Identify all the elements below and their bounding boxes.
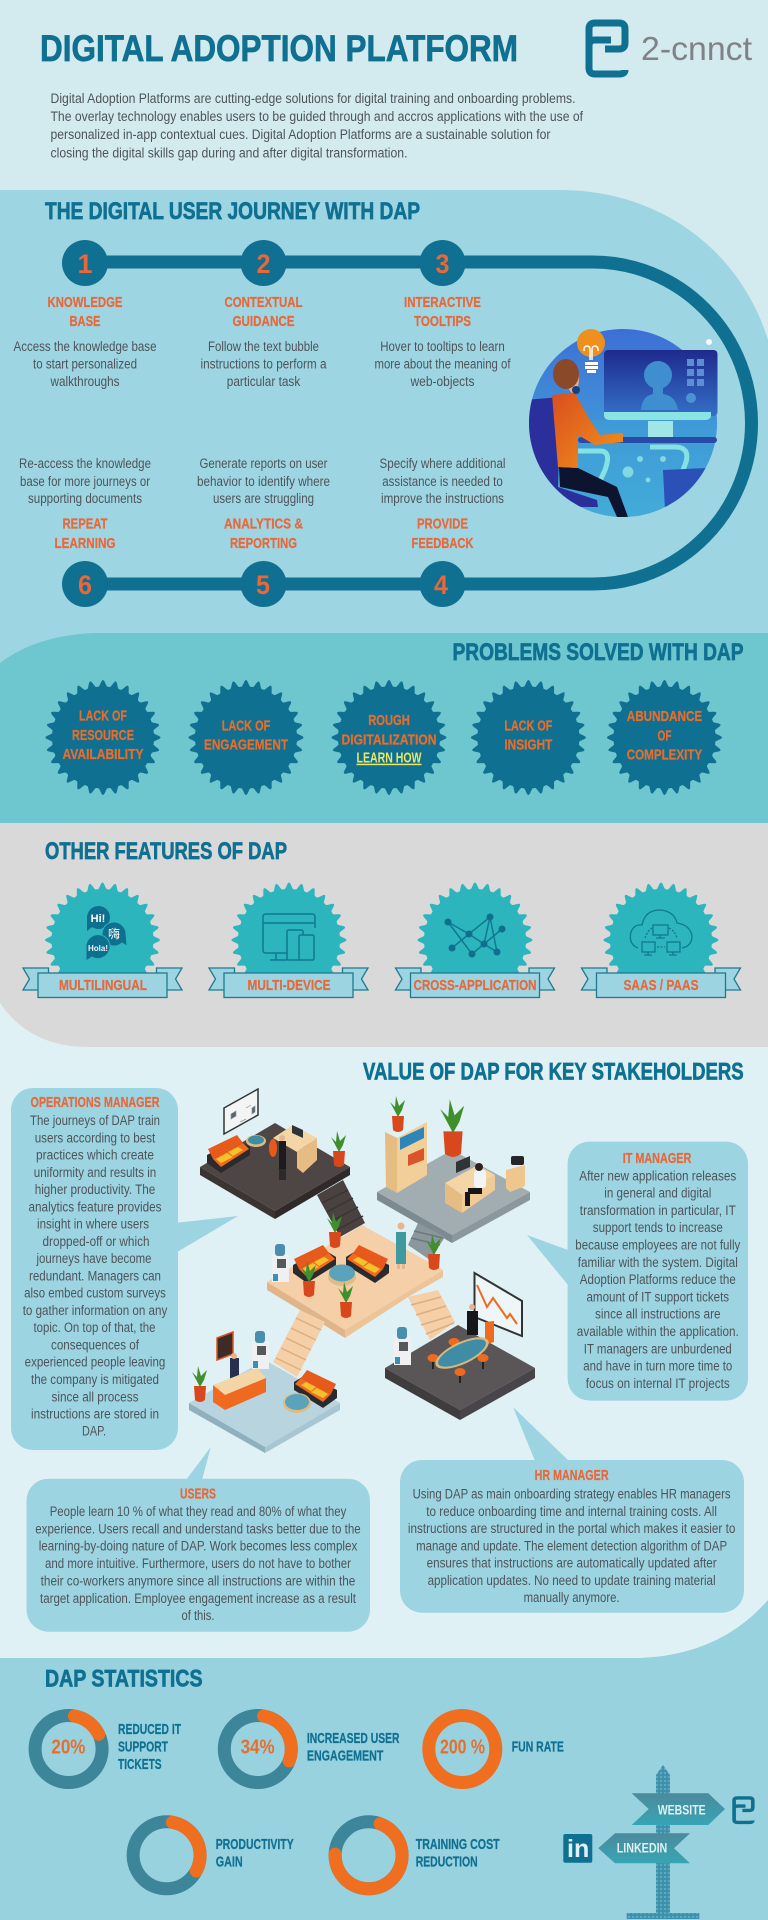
- panel: other features: [0, 823, 768, 1047]
- room: meeting room: [385, 1273, 535, 1420]
- step 1: 1: [77, 249, 93, 279]
- step 5: users are struggling: [213, 491, 314, 506]
- room: IT office: [377, 1096, 530, 1260]
- card: users: [26, 1447, 370, 1632]
- step 1: Access the knowledge base: [14, 339, 156, 354]
- badge: abundance of complexity: COMPLEXITY: [627, 747, 702, 764]
- feature: multi-device: [209, 882, 368, 998]
- step 3: Hover to tooltips to learn: [380, 339, 505, 354]
- card: operations manager: instructions are stored in: [31, 1406, 159, 1422]
- card: operations manager: OPERATIONS MANAGER: [30, 1094, 160, 1111]
- badge: rough digitalization: LEARN HOW: [356, 750, 422, 767]
- stat: fun rate: FUN RATE: [512, 1739, 564, 1756]
- feature: cross-application: CROSS-APPLICATION: [414, 977, 536, 994]
- room: manager office: [200, 1089, 365, 1237]
- stairs: lounge to meeting room: [408, 1290, 455, 1340]
- card: HR manager: [400, 1407, 744, 1613]
- step 4: PROVIDE: [417, 516, 468, 532]
- step 5: [197, 456, 330, 607]
- feature: saas / paas: [582, 882, 740, 998]
- step 2: particular task: [227, 374, 300, 389]
- heading: journey: THE DIGITAL USER JOURNEY WITH DAP: [45, 198, 420, 225]
- step 3: INTERACTIVE: [404, 294, 481, 311]
- step 5: 5: [256, 570, 270, 600]
- signpost: [563, 1765, 753, 1919]
- stat: reduced IT support tickets: SUPPORT: [118, 1739, 168, 1756]
- stat: increased user engagement: ENGAGEMENT: [307, 1747, 383, 1764]
- card: users: USERS: [180, 1486, 216, 1502]
- stat: training cost reduction: [326, 1812, 500, 1898]
- stat: reduced IT support tickets: [30, 1710, 181, 1788]
- card: users: experience. Users recall and understand tasks better due to the: [35, 1521, 361, 1536]
- card: IT manager: Adoption Platforms reduce the: [580, 1272, 736, 1287]
- heading: statistics: DAP STATISTICS: [45, 1666, 202, 1693]
- stat: fun rate: [429, 1716, 564, 1782]
- card: operations manager: to gather information on any: [23, 1303, 168, 1318]
- title: DIGITAL ADOPTION PLATFORM: [40, 28, 518, 69]
- step 4: assistance is needed to: [382, 474, 503, 489]
- card: IT manager: support tends to increase: [593, 1220, 723, 1235]
- card: operations manager: users according to best: [35, 1130, 156, 1145]
- stat: fun rate: 200 %: [440, 1736, 485, 1758]
- badge: abundance of complexity: [607, 680, 722, 795]
- stat: increased user engagement: [219, 1710, 400, 1788]
- badge: lack of engagement: LACK OF: [222, 718, 270, 735]
- step 6: LEARNING: [54, 535, 116, 552]
- card: HR manager: ensures that instructions are automatically updated after: [427, 1556, 717, 1571]
- stat: productivity gain: [128, 1816, 294, 1894]
- heading: features: OTHER FEATURES OF DAP: [45, 838, 287, 865]
- card: users: learning-by-doing nature of DAP. Work becomes less complex: [39, 1539, 358, 1554]
- panel: digital user journey: [0, 190, 768, 700]
- card: operations manager: since all process: [52, 1389, 139, 1404]
- card: IT manager: amount of IT support tickets: [586, 1289, 729, 1304]
- icon: linkedin: in: [567, 1835, 589, 1863]
- intro text: The overlay technology enables users to be guided through and accros applications with the use of: [50, 109, 583, 124]
- badge: abundance of complexity: ABUNDANCE: [627, 708, 702, 725]
- badge: lack of insight: INSIGHT: [504, 737, 552, 754]
- card: IT manager: and have in turn more time to: [583, 1359, 732, 1374]
- step 2: [200, 240, 327, 389]
- stat: increased user engagement: INCREASED USER: [307, 1730, 400, 1747]
- illustration: person at monitor: [524, 329, 718, 520]
- card: operations manager: dropped-off or which: [42, 1234, 150, 1249]
- room: central lounge: [267, 1212, 443, 1338]
- stat: training cost reduction: TRAINING COST: [416, 1836, 500, 1853]
- icon: small logo: [734, 1798, 753, 1822]
- badge: rough digitalization: DIGITALIZATION: [342, 732, 436, 749]
- isometric office illustration: [189, 1089, 535, 1453]
- card: operations manager: The journeys of DAP train: [30, 1113, 160, 1128]
- stat: productivity gain: GAIN: [216, 1854, 243, 1871]
- feature: multilingual: Hi!: [91, 913, 105, 925]
- card: operations manager: practices which create: [36, 1148, 154, 1162]
- step 6: base for more journeys or: [20, 474, 150, 489]
- card: operations manager: the company is mitigated: [31, 1372, 159, 1387]
- sign: website: [632, 1793, 725, 1825]
- step 4: FEEDBACK: [412, 535, 474, 552]
- badge: lack of resource availability: LACK OF: [79, 708, 127, 725]
- feature: multilingual: 嗨: [108, 927, 120, 941]
- badge: lack of insight: [471, 680, 586, 795]
- step 2: instructions to perform a: [200, 356, 327, 372]
- card: HR manager: application updates. No need to update training material: [428, 1573, 716, 1588]
- step 2: CONTEXTUAL: [224, 294, 302, 311]
- card: operations manager: uniformity and results in: [34, 1165, 156, 1180]
- step 6: [19, 456, 151, 607]
- stakeholder background: [0, 990, 768, 1670]
- card: operations manager: DAP.: [82, 1424, 106, 1439]
- step 6: supporting documents: [28, 491, 142, 506]
- card: operations manager: higher productivity. The: [35, 1182, 155, 1197]
- sign: linkedin: [598, 1833, 690, 1863]
- step 5: behavior to identify where: [197, 474, 330, 489]
- card: HR manager: HR MANAGER: [535, 1467, 609, 1484]
- sign: linkedin: LINKEDIN: [617, 1839, 667, 1855]
- step 4: Specify where additional: [380, 456, 506, 471]
- step 1: KNOWLEDGE: [48, 294, 122, 311]
- feature: multilingual: [23, 882, 182, 998]
- step 3: 3: [436, 249, 450, 279]
- badge: lack of engagement: ENGAGEMENT: [204, 737, 288, 754]
- card: operations manager: topic. On top of that, the: [34, 1320, 156, 1335]
- badge: abundance of complexity: OF: [658, 728, 672, 745]
- step 6: REPEAT: [62, 516, 108, 532]
- card: HR manager: manually anymore.: [524, 1590, 620, 1605]
- logo: 2-cnnct: 2-cnnct: [641, 30, 752, 67]
- card: IT manager: since all instructions are: [595, 1307, 721, 1322]
- feature: multi-device: MULTI-DEVICE: [248, 977, 330, 994]
- step 5: REPORTING: [230, 535, 297, 552]
- card: IT manager: IT MANAGER: [623, 1150, 691, 1167]
- card: users: and more intuitive. Furthermore, users do not have to bother: [45, 1556, 351, 1571]
- card: operations manager: redundant. Managers can: [29, 1268, 161, 1283]
- card: users: their co-workers anymore since all instructions are within the: [41, 1573, 355, 1588]
- intro text: Digital Adoption Platforms are cutting-edge solutions for digital training and onboarding problems.: [50, 91, 576, 106]
- step 3: web-objects: [410, 374, 475, 389]
- step 5: Generate reports on user: [200, 456, 328, 471]
- badge: lack of resource availability: RESOURCE: [72, 727, 134, 744]
- card: users: target application. Employee engagement increase as a result: [40, 1591, 356, 1606]
- step 5: ANALYTICS &: [224, 516, 303, 532]
- badge: rough digitalization: [332, 680, 446, 795]
- badge: lack of insight: LACK OF: [504, 718, 552, 735]
- panel: problems solved: [0, 633, 768, 823]
- stat: reduced IT support tickets: REDUCED IT: [118, 1721, 181, 1738]
- feature: saas / paas: SAAS / PAAS: [624, 977, 698, 994]
- stat: increased user engagement: 34%: [241, 1736, 275, 1758]
- step 1: BASE: [70, 313, 100, 330]
- intro text: personalized in-app contextual cues. Digital Adoption Platforms are a sustainable solution for: [50, 127, 551, 142]
- card: IT manager: After new application releases: [579, 1168, 737, 1183]
- stat: training cost reduction: REDUCTION: [416, 1854, 478, 1871]
- card: IT manager: [527, 1142, 748, 1401]
- intro text: [50, 91, 583, 160]
- statistics panel background: [0, 1600, 768, 1920]
- room: reception: [189, 1331, 340, 1453]
- stat: productivity gain: PRODUCTIVITY: [216, 1836, 294, 1853]
- badge: rough digitalization: ROUGH: [368, 712, 410, 729]
- step 1: [14, 240, 156, 389]
- step 3: more about the meaning of: [374, 356, 511, 372]
- card: operations manager: analytics feature provides: [28, 1199, 162, 1214]
- journey track: [85, 262, 752, 584]
- card: users: of this.: [182, 1608, 214, 1623]
- step 1: to start personalized: [33, 356, 137, 372]
- step 4: [380, 456, 506, 607]
- card: IT manager: transformation in particular, IT: [580, 1203, 736, 1218]
- card: operations manager: [11, 1088, 238, 1450]
- step 3: TOOLTIPS: [414, 313, 471, 330]
- card: HR manager: to reduce onboarding time and internal training costs. All: [426, 1504, 717, 1519]
- card: operations manager: experienced people leaving: [25, 1355, 165, 1370]
- badge: lack of resource availability: AVAILABILITY: [62, 746, 144, 763]
- card: operations manager: insight in where users: [37, 1217, 149, 1232]
- intro text: closing the digital skills gap during and after digital transformation.: [50, 146, 408, 160]
- card: IT manager: IT managers are unburdened: [584, 1341, 732, 1356]
- step 6: Re-access the knowledge: [19, 456, 151, 471]
- logo: 2-cnnct: [589, 23, 752, 74]
- badge: lack of resource availability: [46, 680, 160, 795]
- stairs: lounge to reception: [273, 1310, 325, 1377]
- step 6: 6: [78, 570, 92, 600]
- card: operations manager: also embed custom surveys: [24, 1286, 166, 1301]
- card: IT manager: focus on internal IT projects: [586, 1376, 730, 1391]
- card: operations manager: consequences of: [51, 1338, 139, 1352]
- card: IT manager: familiar with the system. Digital: [578, 1255, 738, 1270]
- step 3: [374, 240, 511, 389]
- step 2: GUIDANCE: [232, 313, 294, 330]
- card: IT manager: because employees are not fully: [575, 1238, 741, 1252]
- badge: lack of engagement: [188, 680, 304, 795]
- step 2: Follow the text bubble: [208, 339, 319, 354]
- step 4: improve the instructions: [381, 491, 504, 506]
- feature: multilingual: MULTILINGUAL: [59, 977, 147, 994]
- stat: reduced IT support tickets: TICKETS: [118, 1756, 162, 1773]
- stat: reduced IT support tickets: 20%: [51, 1736, 86, 1758]
- step 4: 4: [434, 570, 448, 600]
- sign: website: WEBSITE: [658, 1801, 706, 1817]
- feature: multilingual: Hola!: [88, 944, 108, 953]
- card: IT manager: available within the application.: [577, 1324, 739, 1339]
- feature: cross-application: [396, 882, 554, 998]
- card: operations manager: journeys have become: [36, 1251, 151, 1266]
- card: IT manager: in general and digital: [604, 1186, 711, 1201]
- step 2: 2: [256, 249, 270, 279]
- card: users: People learn 10 % of what they read and 80% of what they: [50, 1504, 347, 1519]
- step 1: walkthroughs: [50, 374, 120, 389]
